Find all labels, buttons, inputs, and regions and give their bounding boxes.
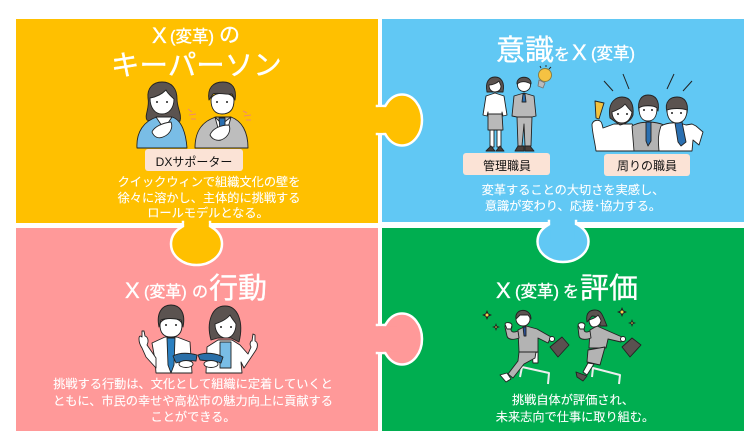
description: key person: クイックウィンで組織文化の壁を (118, 175, 300, 189)
description: action: ともに、市民の幸せや高松市の魅力向上に貢献する (53, 393, 333, 408)
label: managers (463, 153, 550, 175)
puzzle tab: blue to green (538, 217, 588, 262)
illustration: woman jumping hurdle (576, 310, 641, 384)
puzzle tab: yellow to pink (171, 218, 222, 265)
panel: action (16, 228, 378, 431)
illustration: man with book (139, 305, 197, 373)
illustration: managers (483, 77, 536, 151)
label: DX supporter: DXサポーター (156, 155, 232, 169)
description: evaluation: 挑戦自体が評価され、 (512, 392, 634, 407)
description: action: 挑戦する行動は、文化として組織に定着していくと (53, 376, 333, 391)
heading: action: の (192, 284, 208, 301)
description: evaluation: 未来志向で仕事に取り組む。 (496, 409, 654, 424)
heading: key person: の (219, 24, 240, 47)
panel: awareness (382, 19, 744, 222)
illustration: woman with book (198, 306, 257, 373)
label: colleagues (604, 154, 690, 176)
icon: emphasis marks (188, 109, 251, 120)
heading: action: (変革) (144, 283, 187, 301)
label: managers: 管理職員 (483, 158, 531, 173)
heading: awareness: を (554, 46, 570, 64)
heading: key person: (変革) (170, 27, 214, 46)
heading: action: X (125, 278, 140, 303)
label: colleagues: 周りの職員 (617, 159, 677, 173)
heading: evaluation: 評価 (580, 272, 638, 305)
label: DX supporter (145, 149, 243, 171)
description: key person: ロールモデルとなる。 (147, 205, 269, 220)
panel: evaluation (382, 228, 744, 431)
description: awareness: 変革することの大切さを実感し、 (482, 182, 664, 197)
heading: evaluation: を (563, 283, 579, 301)
heading: key person: キーパーソン (111, 50, 282, 82)
puzzle tab: yellow to blue (373, 94, 422, 146)
heading: awareness: X (572, 40, 587, 65)
heading: awareness: 意識 (496, 34, 554, 67)
illustration: colleagues (592, 74, 703, 151)
illustration: two DX supporters (137, 82, 248, 148)
icon: light bulb (538, 65, 552, 88)
description: key person: 徐々に溶かし、主体的に挑戦する (118, 190, 300, 205)
illustration: man jumping hurdle (500, 310, 569, 384)
heading: evaluation: X (496, 278, 511, 303)
puzzle tab: pink to green (373, 314, 422, 364)
panel: key person (16, 19, 378, 223)
icon: sparkle centres (486, 310, 633, 328)
heading: evaluation: (変革) (515, 282, 559, 301)
heading: key person: X (152, 23, 167, 48)
description: action: ことができる。 (150, 409, 236, 424)
description: awareness: 意識が変わり、応援･協力する。 (485, 198, 661, 213)
icon: sparkles (482, 307, 636, 331)
heading: action: 行動 (209, 272, 267, 305)
heading: awareness: (変革) (591, 44, 635, 63)
